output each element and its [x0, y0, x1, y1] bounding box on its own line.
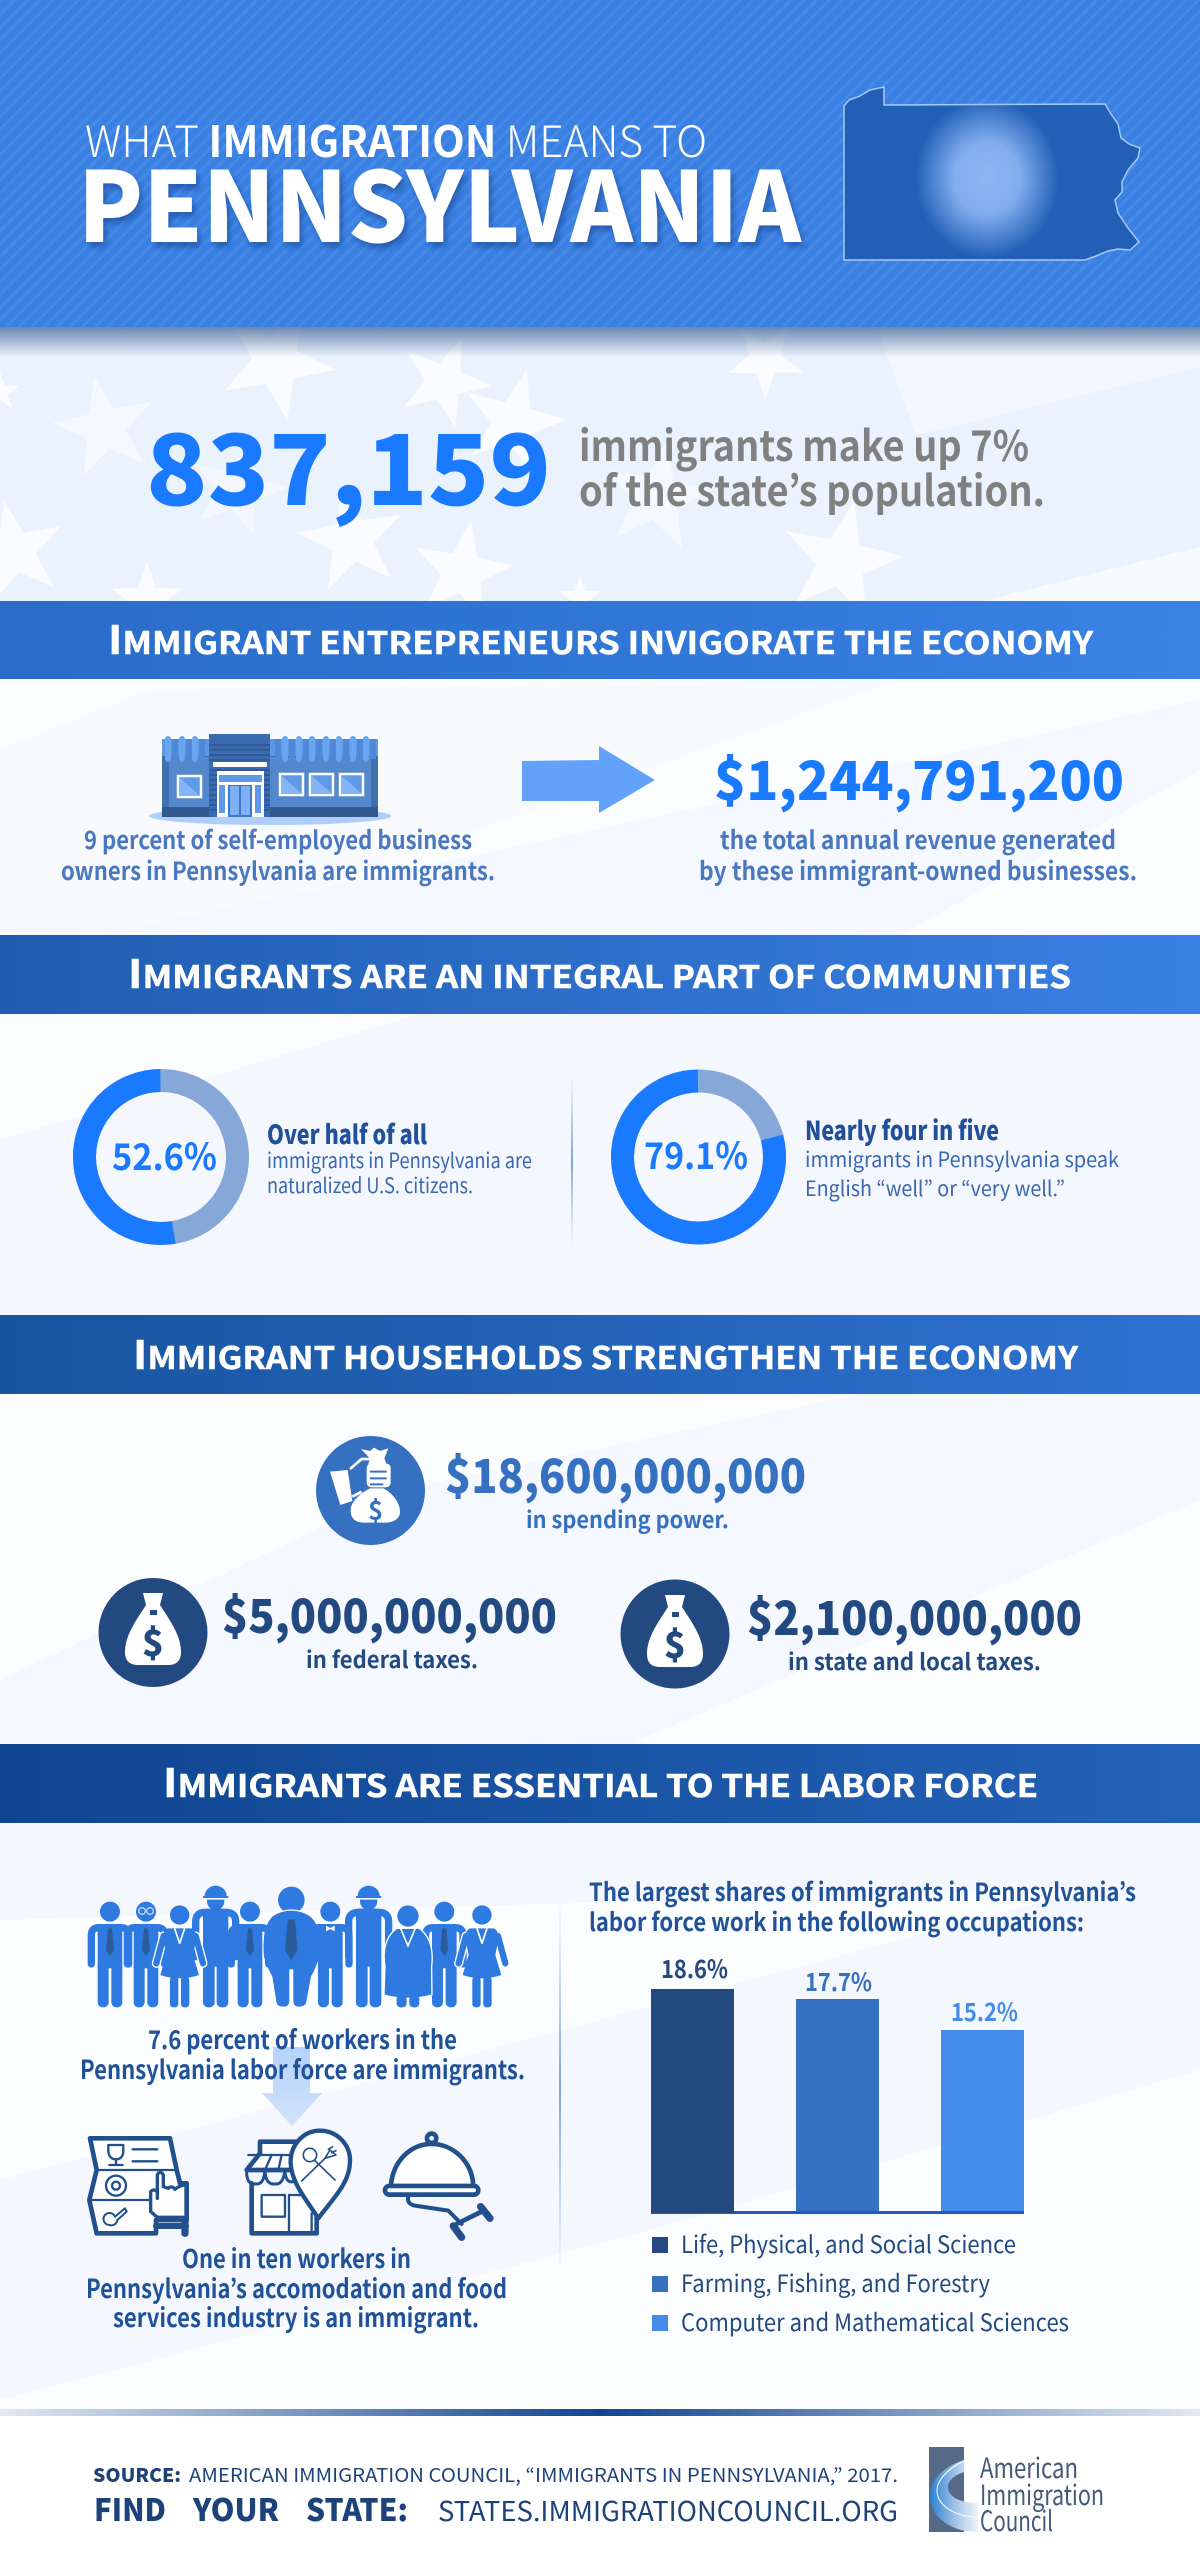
- icon: storefront: [149, 734, 391, 825]
- text: one in ten: services industry is an immigrant.: [113, 2298, 479, 2335]
- donut chart: English proficiency: 79.1%: [644, 1126, 748, 1180]
- arrow: down: [262, 2047, 322, 2126]
- text: over half: [267, 1115, 532, 1200]
- text: self-employed share: [61, 821, 495, 888]
- icon: money bag federal: [98, 1578, 208, 1687]
- icon: group of workers: [91, 1886, 505, 2007]
- spending power figure: $18,600,000,000: [445, 1438, 806, 1507]
- text: revenue description: the total annual revenue generated: [720, 821, 1116, 857]
- title line: what immigration means to: WHAT IMMIGRATION MEANS TO: [85, 108, 707, 170]
- text: occupations heading: labor force work in the following occupations:: [589, 1903, 1084, 1939]
- legend: [652, 2225, 1069, 2338]
- section heading: entrepreneurs: IMMIGRANT ENTREPRENEURS INVIGORATE THE ECONOMY: [108, 610, 1094, 666]
- section heading: households: [0, 1315, 1200, 1394]
- footer source text: YOUR: [192, 2485, 279, 2530]
- state and local taxes figure: [747, 1580, 1082, 1677]
- map: Pennsylvania state outline: [844, 87, 1140, 260]
- donut chart: naturalized citizens: [84, 1080, 238, 1234]
- section heading: labor force: [0, 1744, 1200, 1823]
- bar: life, physical, and social science: 18.6%: [661, 1950, 728, 1986]
- icons: food service: [89, 2131, 490, 2237]
- text: 7.6 percent of workers: Pennsylvania labor force are immigrants.: [80, 2050, 525, 2087]
- spending power figure: [445, 1438, 806, 1535]
- text: nearly four in five: [805, 1111, 1119, 1203]
- bar: life, physical, and social science: [651, 1950, 734, 2213]
- text: 7.6 percent of workers: [80, 2020, 525, 2087]
- footer source text: [93, 2461, 898, 2530]
- title: Pennsylvania: PENNSYLVANIA: [78, 129, 802, 270]
- headline stat: 837,159: 837,159: [146, 392, 551, 534]
- bar: farming, fishing, and forestry: [796, 1963, 879, 2211]
- section heading: households: IMMIGRANT HOUSEHOLDS STRENGTHEN THE ECONOMY: [133, 1325, 1079, 1381]
- donut chart: English proficiency: [622, 1081, 774, 1233]
- legend: Computer and Mathematical Sciences: [681, 2303, 1069, 2338]
- footer source text: STATE:: [306, 2485, 408, 2530]
- arrow: right: [522, 746, 655, 813]
- text: occupations heading: [589, 1873, 1136, 1939]
- text: over half: naturalized U.S. citizens.: [267, 1170, 473, 1200]
- text: revenue description: [699, 821, 1137, 888]
- footer source text: FIND: [94, 2485, 166, 2530]
- text: one in ten: One in ten workers in: [182, 2239, 411, 2276]
- state and local taxes figure: $2,100,000,000: [747, 1580, 1082, 1649]
- donut chart: naturalized citizens: 52.6%: [112, 1127, 217, 1181]
- spending power figure: in spending power.: [526, 1501, 729, 1535]
- logo: American Immigration Council: Council: [980, 2500, 1053, 2540]
- revenue figure: $1,244,791,200: [714, 737, 1124, 816]
- federal taxes figure: $5,000,000,000: [222, 1578, 557, 1647]
- logo: American Immigration Council: Immigration: [980, 2474, 1104, 2514]
- text: over half: Over half of all: [267, 1115, 427, 1152]
- icon: restaurant location: [247, 2131, 350, 2233]
- icon: money bag state: $: [664, 1617, 686, 1669]
- headline stat: 837,159: [146, 392, 1045, 534]
- footer source text: AMERICAN IMMIGRATION COUNCIL, “IMMIGRANTS IN PENNSYLVANIA,” 2017.: [189, 2461, 898, 2488]
- logo: American Immigration Council: [929, 2447, 1104, 2540]
- federal taxes figure: in federal taxes.: [306, 1641, 478, 1675]
- section heading: communities: IMMIGRANTS ARE AN INTEGRAL PART OF COMMUNITIES: [128, 944, 1071, 1000]
- icon: money bag state: [620, 1580, 730, 1688]
- section heading: communities: [0, 935, 1200, 1014]
- text: revenue description: by these immigrant-owned businesses.: [699, 852, 1137, 888]
- legend: Life, Physical, and Social Science: [681, 2225, 1016, 2260]
- federal taxes figure: [222, 1578, 557, 1675]
- stat description: of the state’s population.: [579, 458, 1045, 519]
- text: 7.6 percent of workers: 7.6 percent of workers in the: [148, 2020, 457, 2057]
- section heading: labor force: IMMIGRANTS ARE ESSENTIAL TO THE LABOR FORCE: [163, 1753, 1038, 1809]
- bar: computer and mathematical sciences: 15.2%: [951, 1993, 1018, 2029]
- icon: money bag federal: $: [142, 1615, 164, 1667]
- text: over half: immigrants in Pennsylvania are: [267, 1145, 532, 1175]
- stat description: immigrants make up 7%: [579, 413, 1029, 474]
- section heading: entrepreneurs: [0, 601, 1200, 679]
- icon: hand holding money bag: [316, 1436, 425, 1545]
- text: nearly four in five: immigrants in Pennsylvania speak: [805, 1144, 1119, 1174]
- text: self-employed share: 9 percent of self-employed business: [84, 821, 472, 857]
- bar: computer and mathematical sciences: [941, 1993, 1024, 2211]
- stat description: [579, 413, 1045, 519]
- footer source text: STATES.IMMIGRATIONCOUNCIL.ORG: [438, 2490, 898, 2529]
- state and local taxes figure: in state and local taxes.: [788, 1643, 1041, 1677]
- legend: Farming, Fishing, and Forestry: [681, 2264, 990, 2299]
- text: self-employed share: owners in Pennsylvania are immigrants.: [61, 852, 495, 888]
- text: occupations heading: The largest shares of immigrants in Pennsylvania’s: [589, 1873, 1136, 1909]
- bar: farming, fishing, and forestry: 17.7%: [805, 1963, 872, 1999]
- text: nearly four in five: Nearly four in five: [805, 1111, 999, 1148]
- text: one in ten: [86, 2239, 507, 2335]
- icon: serving cloche: [385, 2134, 490, 2237]
- bar chart: occupations: [651, 1950, 1024, 2214]
- icon: menu: [89, 2138, 187, 2233]
- text: one in ten: Pennsylvania’s accomodation and food: [86, 2269, 507, 2306]
- footer source text: SOURCE:: [93, 2461, 181, 2488]
- logo: American Immigration Council: American: [980, 2447, 1078, 2487]
- icon: hand holding money bag: $: [368, 1492, 383, 1528]
- header banner: [0, 0, 1200, 357]
- text: nearly four in five: English “well” or “very well.”: [805, 1173, 1065, 1203]
